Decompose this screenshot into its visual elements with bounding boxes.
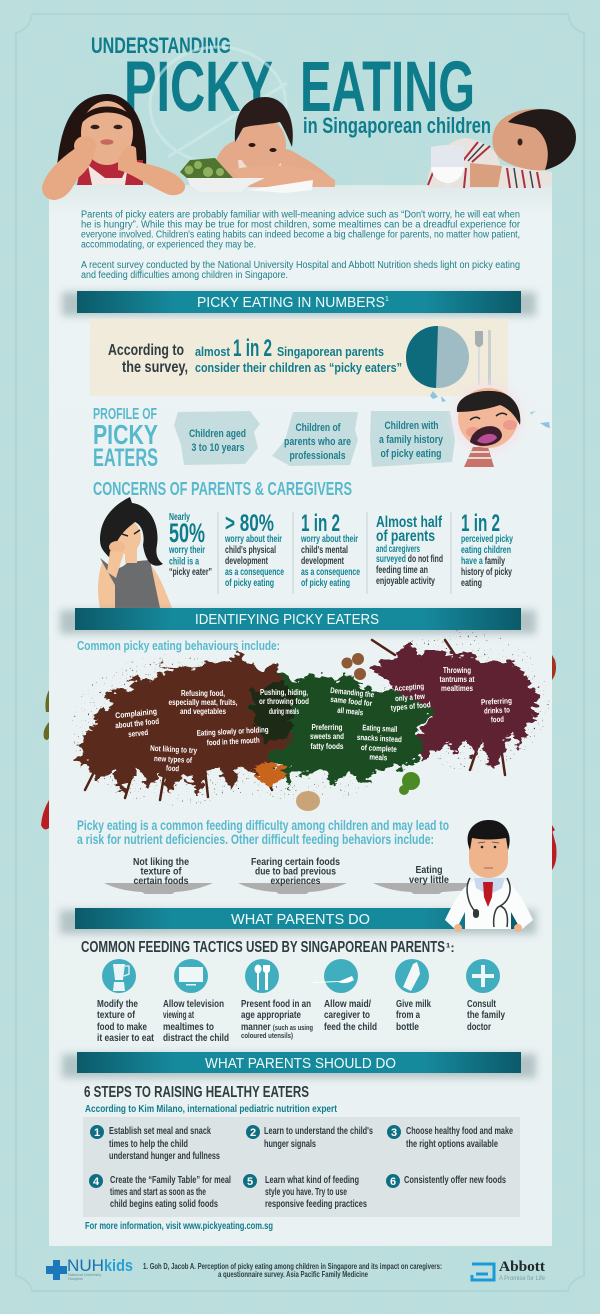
step 4: times and start as soon as the	[110, 1187, 206, 1198]
label: refusing	[168, 689, 238, 716]
step 5: Learn what kind of feeding	[265, 1175, 359, 1186]
stats: nearly 50%: 50%	[169, 518, 205, 548]
photo: boy with plate	[180, 97, 335, 193]
label: tantrums: Throwing	[443, 666, 471, 675]
logo: NUH kids: kids	[104, 1256, 133, 1275]
heading ribbon: What parents should do: WHAT PARENTS SHOULD DO	[205, 1055, 396, 1072]
text: feeding difficulty: a risk for nutrient deficiencies. Other difficult feeding behaviors include:	[77, 831, 434, 847]
label: complaining: served	[128, 728, 149, 739]
intro text: Parents of picky eaters are probably familiar with well-meaning advice such as “Don't worry, he will eat when	[81, 210, 520, 220]
intro text: and feeding difficulties among children in Singapore.	[81, 270, 288, 281]
title: UNDERSTANDING	[91, 33, 231, 58]
label: demanding	[328, 686, 375, 718]
label: pushing: Pushing, hiding,	[260, 688, 308, 697]
title: EATING	[300, 48, 475, 127]
step 4: Create the “Family Table” for meal	[110, 1175, 231, 1186]
photo: boy with milk	[427, 109, 576, 192]
intro text: A recent survey conducted by the National University Hospital and Abbott Nutrition sheds light on picky eating	[81, 260, 520, 271]
label: sweets: Preferring	[312, 723, 343, 732]
tactic: television: Allow television	[163, 999, 224, 1010]
step 5: responsive feeding practices	[265, 1199, 367, 1210]
tactic: spoon: feed the child	[324, 1022, 377, 1033]
splatter streaks	[85, 640, 505, 800]
label: tantrums: tantrums at	[440, 675, 475, 684]
stats: almost half: feeding time an	[376, 565, 428, 576]
tactic: bottle: from a	[396, 1010, 420, 1021]
step 3: the right options available	[406, 1139, 498, 1150]
panel: survey stat: According to	[108, 342, 184, 359]
stats: nearly 50%: “picky eater”	[169, 567, 212, 578]
heading: profile of picky eaters: PROFILE OF	[93, 406, 157, 423]
tactic: utensils	[241, 959, 313, 1040]
food: nuts	[342, 653, 366, 680]
plate: texture	[104, 856, 213, 894]
label: not liking: food	[166, 764, 179, 773]
decorative plate watermark	[150, 47, 287, 163]
tactic: doctor	[466, 959, 505, 1033]
tactic: utensils: age appropriate	[241, 1010, 301, 1021]
heading: profile of picky eaters: PICKY	[93, 419, 158, 450]
green splat	[246, 668, 436, 790]
heading ribbon: What parents do	[60, 908, 536, 934]
stats: almost half	[376, 514, 443, 587]
label: eating slowly: food in the mouth	[206, 736, 260, 747]
footnote: 1. Goh D, Jacob A. Perception of picky eating among children in Singapore and its impact on caregivers:	[143, 1262, 442, 1271]
label: not liking: new types of	[154, 754, 192, 765]
title: PICKY	[124, 48, 273, 127]
tactic: blender	[97, 959, 155, 1044]
label: drinks: Preferring	[481, 696, 512, 707]
label: accepting	[389, 681, 431, 713]
tactic: utensils: Present food in an	[241, 999, 311, 1010]
plate: very little	[373, 864, 470, 894]
profile card: family history: Children with	[384, 420, 439, 432]
link: more information: For more information, visit www.pickyeating.com.sg	[85, 1221, 273, 1232]
panel: survey stat: Singaporean parents	[277, 344, 384, 359]
heading: common behaviours: Common picky eating behaviours include:	[77, 638, 280, 653]
logo: Abbott	[470, 1259, 546, 1282]
heading ribbon: Picky eating in numbers	[62, 291, 536, 316]
label: accepting: only a few	[395, 692, 426, 703]
intro text: accommodating, or experienced they may be.	[81, 240, 256, 250]
plate: very little: Eating	[416, 864, 442, 876]
stats: 80%: worry about their	[224, 534, 282, 545]
step 1: understand hunger and fullness	[109, 1151, 220, 1162]
step 1	[90, 1125, 220, 1162]
step 5: 5	[247, 1176, 253, 1188]
stats: 80%: development	[225, 556, 268, 567]
label: drinks	[481, 696, 513, 725]
stats: 1 in 2 family: history of picky	[461, 567, 512, 578]
stats: almost half: Almost half	[376, 514, 443, 531]
tactic: spoon: caregiver to	[324, 1010, 370, 1021]
logo: NUH kids: NUH	[67, 1256, 104, 1275]
label: demanding: Demanding the	[330, 686, 375, 699]
profile card: family history	[370, 411, 455, 467]
tactic: blender: texture of	[97, 1010, 136, 1021]
stats: 1 in 2 mental	[300, 510, 360, 589]
profile card: age: Children aged	[189, 428, 246, 440]
heading ribbon: Identifying picky eaters: IDENTIFYING PICKY EATERS	[195, 611, 379, 628]
label: snacks: Eating small	[362, 723, 398, 734]
dark overlap	[250, 680, 295, 745]
label: not liking	[149, 744, 198, 774]
intro text: everyone involved. Children's eating habits can indeed become a big challenge for parents, no matter how patient,	[81, 230, 520, 240]
photo: girl	[42, 94, 185, 200]
tactic: utensils: coloured utensils)	[241, 1033, 293, 1040]
tactic: doctor: the family	[467, 1010, 505, 1021]
stats: 1 in 2 family: eating	[461, 578, 482, 589]
step 2: 2	[250, 1127, 256, 1139]
stats: nearly 50%	[168, 512, 212, 578]
tactic: spoon	[313, 959, 377, 1033]
label: sweets	[310, 723, 344, 751]
panel: survey stat: almost	[195, 344, 231, 359]
tactic: television: distract the child	[163, 1033, 229, 1044]
stats: 1 in 2 family: have a family	[461, 556, 505, 567]
label: complaining: Complaining	[115, 707, 158, 720]
heading ribbon: What parents should do	[62, 1052, 536, 1078]
intro text: he is hungry”. While this may be true for most children, some mealtimes can be a dreadful experience for	[81, 220, 521, 230]
heading: profile of picky eaters: EATERS	[93, 444, 158, 472]
step 2	[246, 1125, 373, 1150]
logo: NUH kids: National University	[68, 1272, 101, 1277]
stats: 1 in 2 mental: of picky eating	[301, 578, 350, 589]
food: rice	[296, 791, 320, 811]
stats: nearly 50%: child is a	[169, 556, 199, 568]
stats: 1 in 2 mental: as a consequence	[301, 567, 360, 578]
stats: 80%: > 80%	[225, 510, 274, 537]
step 6: Consistently offer new foods	[404, 1175, 506, 1186]
heading: six steps	[84, 1084, 338, 1115]
heading: profile of picky eaters	[93, 406, 158, 472]
tactic: doctor: Consult	[467, 999, 497, 1010]
plate: texture: texture of	[140, 866, 182, 878]
logo: Abbott: Abbott	[499, 1259, 545, 1275]
label: pushing: during meals	[269, 707, 299, 716]
step 1: Establish set meal and snack	[109, 1126, 211, 1137]
step 4	[89, 1174, 231, 1210]
label: sweets: fatty foods	[310, 742, 344, 751]
step 6	[386, 1174, 506, 1188]
step 5	[243, 1174, 367, 1210]
icon: worried mother	[98, 497, 172, 608]
label: eating slowly: Eating slowly or holding	[196, 725, 269, 738]
stats: 1 in 2 mental: worry about their	[300, 534, 358, 545]
plate: very little: very little	[409, 874, 449, 886]
stats: almost half: of parents	[376, 528, 435, 545]
stats: 1 in 2 family	[461, 510, 513, 589]
profile card: professionals	[272, 412, 358, 466]
tactic: bottle: bottle	[396, 1022, 419, 1033]
stats: 1 in 2 mental: 1 in 2	[301, 510, 340, 537]
tactic: television: mealtimes to	[163, 1022, 214, 1033]
step 1: times to help the child	[109, 1139, 188, 1150]
profile card: professionals: parents who are	[284, 436, 351, 448]
dividers	[218, 512, 451, 594]
panel: main card	[49, 185, 552, 1246]
plate: fear: Fearing certain foods	[251, 856, 340, 868]
step 1: 1	[94, 1127, 100, 1139]
label: snacks	[356, 723, 403, 763]
heading: six steps: 6 STEPS TO RAISING HEALTHY EATERS	[84, 1084, 309, 1101]
logo: NUH kids	[46, 1256, 133, 1281]
stats: 1 in 2 family: 1 in 2	[461, 510, 500, 537]
tactic: bottle: Give milk	[396, 999, 431, 1010]
brown splat	[78, 650, 292, 795]
stats: 80%: as a consequence	[225, 567, 284, 578]
stats: 1 in 2 family: eating children	[461, 545, 511, 556]
plate: texture: certain foods	[134, 875, 189, 887]
heading ribbon: Picky eating in numbers: 1	[385, 296, 389, 303]
tactic: utensils: manner (such as using	[241, 1022, 313, 1033]
label: refusing: and vegetables	[180, 707, 226, 716]
label: accepting: types of food	[390, 700, 431, 713]
icon: doctor	[445, 820, 533, 932]
label: sweets: sweets and	[310, 732, 344, 741]
step 3: 3	[391, 1127, 397, 1139]
label: pushing	[259, 688, 309, 716]
label: demanding: same food for	[330, 695, 373, 708]
step 2: Learn to understand the child's	[264, 1126, 373, 1137]
label: snacks: meals	[369, 753, 388, 762]
label: tantrums	[440, 666, 475, 693]
title: in Singaporean children	[303, 113, 491, 138]
title	[91, 33, 491, 138]
step 4: 4	[93, 1176, 100, 1188]
label: tantrums: mealtimes	[441, 684, 473, 693]
tactic: doctor: doctor	[467, 1022, 491, 1033]
label: snacks: of complete	[361, 743, 397, 754]
plate: fear: experiences	[270, 875, 321, 887]
tactic: blender: it easier to eat	[97, 1033, 155, 1044]
heading: concerns: CONCERNS OF PARENTS & CAREGIVERS	[93, 479, 352, 499]
profile card: professionals: Children of	[296, 422, 341, 434]
logo: NUH kids: Hospital	[68, 1276, 83, 1281]
step 4: child begins eating solid foods	[110, 1199, 218, 1210]
icon: half plate with cutlery	[406, 326, 491, 388]
plate: fear: due to bad previous	[255, 866, 336, 878]
stats: 1 in 2 mental: child's mental	[301, 545, 348, 556]
label: drinks: drinks to	[484, 705, 510, 716]
stats: 80%: of picky eating	[225, 578, 274, 589]
text: feeding difficulty: Picky eating is a common feeding difficulty among children and may lead to	[77, 817, 449, 833]
heading suffix: ¹:	[446, 940, 455, 955]
label: snacks: snacks instead	[357, 733, 402, 744]
text: feeding difficulty	[77, 817, 449, 847]
heading ribbon: Picky eating in numbers: PICKY EATING IN NUMBERS	[197, 294, 385, 311]
profile card: professionals: professionals	[290, 450, 346, 462]
stats: almost half: and caregivers	[376, 544, 420, 555]
label: refusing: especially meat, fruits,	[168, 698, 238, 707]
tactic: blender: Modify the	[97, 999, 138, 1010]
label: drinks: food	[491, 715, 504, 724]
maroon splat	[372, 640, 540, 770]
panel: survey stat: 1 in 2	[233, 335, 272, 362]
panel: survey stat: consider their children as “picky eaters”	[195, 360, 402, 375]
side drips	[41, 655, 556, 870]
intro text	[81, 210, 521, 281]
footnote: a questionnaire survey. Asia Pacific Family Medicine	[218, 1270, 368, 1279]
step 5: style you have. Try to use	[265, 1187, 347, 1198]
heading: feeding tactics: COMMON FEEDING TACTICS USED BY SINGAPOREAN PARENTS	[81, 939, 445, 956]
chart: food splatter	[70, 630, 550, 811]
label: complaining	[114, 707, 161, 740]
footnote	[143, 1262, 442, 1279]
heading ribbon: Identifying picky eaters	[60, 608, 536, 634]
stats: nearly 50%: Nearly	[169, 512, 190, 523]
profile card: family history: a family history	[379, 434, 444, 446]
step 2: hunger signals	[264, 1139, 316, 1150]
splatter speckles	[70, 630, 550, 806]
label: eating slowly	[196, 725, 269, 748]
stats: nearly 50%: worry their	[168, 545, 205, 556]
label: pushing: or throwing food	[259, 697, 309, 706]
step 3: Choose healthy food and make	[406, 1126, 513, 1137]
panel: survey stat: the survey,	[122, 359, 188, 376]
stats: 80%	[224, 510, 284, 589]
step 3	[387, 1125, 513, 1150]
stats: 1 in 2 mental: development	[301, 556, 344, 567]
stats: 1 in 2 family: perceived picky	[461, 534, 513, 545]
heading ribbon: What parents do: WHAT PARENTS DO	[231, 911, 370, 928]
tactic: blender: food to make	[97, 1022, 147, 1033]
tactic: television	[163, 959, 229, 1044]
profile card: age	[174, 411, 260, 465]
plate: texture: Not liking the	[133, 856, 189, 868]
food: broccoli	[399, 772, 420, 795]
tactic: spoon: Allow maid/	[324, 999, 371, 1010]
heading: six steps: According to Kim Milano, international pediatric nutrition expert	[85, 1104, 338, 1115]
label: not liking: Not liking to try	[150, 744, 198, 755]
tactic: bottle	[395, 959, 431, 1033]
tactic: television: viewing at	[163, 1010, 194, 1021]
label: accepting: Accepting	[394, 682, 425, 693]
icon: crying child	[430, 382, 550, 467]
panel: survey stat	[90, 319, 508, 396]
stats: almost half: enjoyable activity	[376, 576, 435, 587]
label: demanding: all meals	[337, 706, 364, 717]
panel: six steps	[83, 1117, 520, 1217]
step 6: 6	[390, 1176, 396, 1188]
logo: Abbott: A Promise for Life	[499, 1276, 546, 1282]
stats: 80%: child's physical	[225, 545, 276, 556]
profile card: age: 3 to 10 years	[192, 442, 244, 454]
stats: almost half: surveyed do not find	[376, 554, 443, 565]
profile card: family history: of picky eating	[380, 448, 442, 460]
label: refusing: Refusing food,	[181, 689, 225, 698]
plate: fear	[238, 856, 347, 894]
label: complaining: about the food	[115, 717, 160, 730]
